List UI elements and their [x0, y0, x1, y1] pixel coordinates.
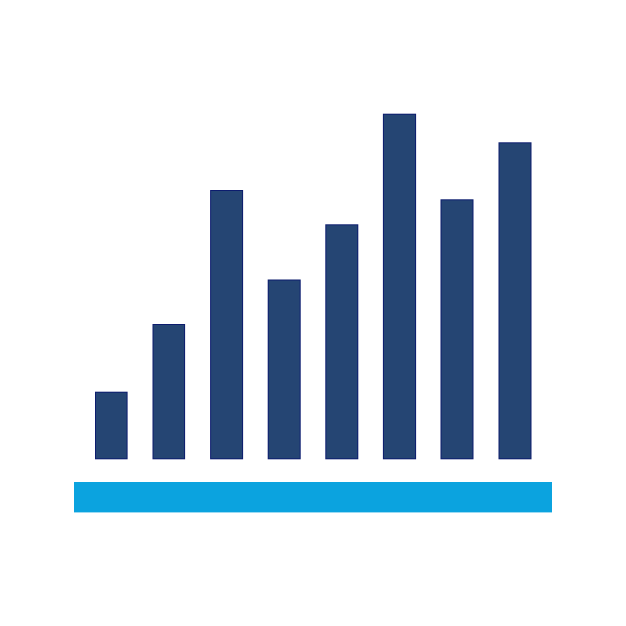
- bar chart: [96, 114, 531, 459]
- baseline: blue bar: [74, 482, 552, 512]
- bar 6: [383, 114, 416, 459]
- bar 8: [499, 143, 531, 459]
- bar 3: [211, 190, 243, 459]
- bar 4: [268, 280, 300, 459]
- bar 7: [441, 200, 473, 459]
- bar 5: [326, 225, 358, 459]
- bar 1: [96, 392, 127, 459]
- bar 2: [153, 324, 185, 459]
